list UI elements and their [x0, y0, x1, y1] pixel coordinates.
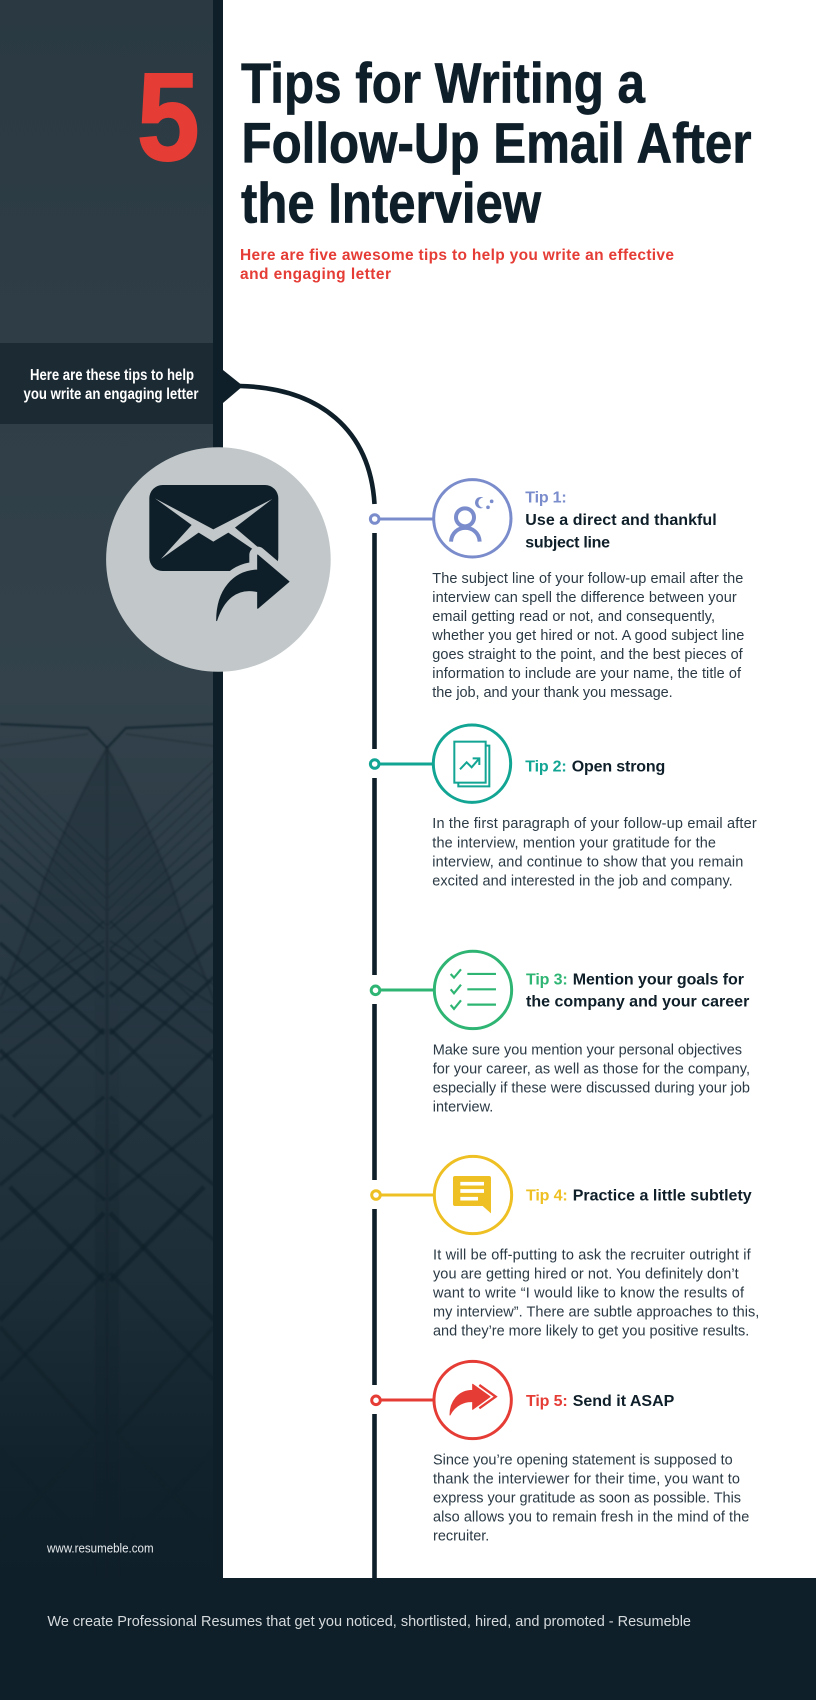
body text: thank the interviewer for their time, you want to — [433, 1471, 740, 1487]
heading: Practice a little subtlety — [573, 1188, 752, 1205]
sidebar dark strip — [213, 0, 223, 1578]
heading — [526, 971, 749, 1011]
body text: interview, and continue to show that you remain — [432, 854, 743, 870]
footer band: We create Professional Resumes that get you noticed, shortlisted, hired, and promoted - Resumeble — [47, 1614, 691, 1630]
title — [241, 52, 752, 236]
heading — [525, 759, 665, 776]
body text: excited and interested in the job and company. — [432, 873, 733, 889]
body text: Since you’re opening statement is supposed to — [433, 1452, 733, 1468]
body text: the interview, mention your gratitude for the — [432, 835, 716, 851]
node and connector — [371, 986, 434, 995]
icon: chat bubble — [434, 1156, 512, 1234]
body text — [431, 571, 744, 701]
heading: subject line — [525, 534, 610, 551]
body text: interview can spell the difference between your — [432, 590, 737, 606]
circle with email icon — [106, 447, 331, 672]
website link: www.resumeble.com — [46, 1541, 154, 1556]
tip 4 — [372, 1156, 759, 1339]
body text: my interview”. There are subtle approaches to this, — [433, 1304, 759, 1320]
body text: interview. — [433, 1099, 493, 1115]
banner: tips intro: Here are these tips to help — [30, 367, 194, 384]
body text: especially if these were discussed during your job — [433, 1080, 750, 1096]
heading: Use a direct and thankful — [525, 512, 717, 529]
title: Follow-Up Email After — [242, 112, 752, 176]
sidebar photo panel — [0, 0, 214, 1578]
heading: Tip 4: — [526, 1188, 568, 1205]
node and connector — [370, 760, 433, 768]
body text — [433, 1452, 749, 1544]
heading — [525, 490, 717, 551]
big number 5: 5 — [137, 49, 200, 187]
icon: forward arrow — [434, 1361, 511, 1439]
node and connector — [372, 1191, 434, 1199]
subtitle: and engaging letter — [240, 266, 391, 283]
title: Tips for Writing a — [241, 52, 646, 116]
node and connector — [370, 515, 433, 523]
icon: checklist — [434, 951, 512, 1029]
body text: the job, and your thank you message. — [432, 685, 673, 701]
body text: It will be off-putting to ask the recruiter outright if — [433, 1247, 752, 1263]
body text: also allows you to remain fresh in the mind of the — [433, 1509, 749, 1525]
footer band — [0, 1578, 816, 1700]
body text: email getting read or not, and consequently, — [432, 609, 715, 625]
body text: want to write “I would like to know the results of — [432, 1285, 745, 1301]
heading: Tip 5: — [526, 1393, 568, 1410]
node and connector — [372, 1396, 435, 1405]
body text — [433, 1042, 750, 1115]
banner: tips intro — [0, 343, 213, 424]
body text: whether you get hired or not. A good subject line — [431, 628, 744, 644]
body text: express your gratitude as soon as possible. This — [433, 1490, 741, 1506]
heading: Mention your goals for — [573, 971, 744, 988]
title: the Interview — [241, 172, 542, 236]
body text: recruiter. — [433, 1528, 489, 1544]
heading: the company and your career — [526, 994, 749, 1011]
icon: report with trend arrow — [433, 725, 511, 802]
heading: Tip 3: — [526, 971, 568, 988]
body text: Make sure you mention your personal objectives — [433, 1042, 742, 1058]
body text: information to include are your name, the title of — [432, 666, 742, 682]
body text: In the first paragraph of your follow-up email after — [432, 816, 757, 832]
body text — [432, 816, 757, 889]
tip 1 — [370, 480, 744, 701]
heading: Tip 1: — [525, 490, 567, 507]
body text: and they’re more likely to get you positive results. — [433, 1323, 749, 1339]
heading: Open strong — [572, 759, 665, 776]
body text: for your career, as well as those for the company, — [433, 1061, 750, 1077]
subtitle: Here are five awesome tips to help you write an effective — [240, 247, 674, 264]
body text — [432, 1247, 759, 1339]
banner: tips intro: you write an engaging letter — [24, 386, 198, 403]
icon: envelope with arrow — [149, 485, 289, 621]
tip 2 — [370, 725, 757, 889]
body text: The subject line of your follow-up email after the — [432, 571, 743, 587]
tip 3 — [371, 951, 750, 1115]
timeline connector — [223, 370, 374, 1578]
heading — [526, 1393, 675, 1410]
tip 5 — [372, 1361, 749, 1544]
heading: Tip 2: — [525, 759, 567, 776]
body text: you are getting hired or not. You definitely don’t — [433, 1266, 739, 1282]
body text: goes straight to the point, and the best pieces of — [432, 647, 744, 663]
icon: person with thought dots — [434, 480, 511, 557]
heading: Send it ASAP — [573, 1393, 675, 1410]
subtitle — [240, 247, 674, 283]
